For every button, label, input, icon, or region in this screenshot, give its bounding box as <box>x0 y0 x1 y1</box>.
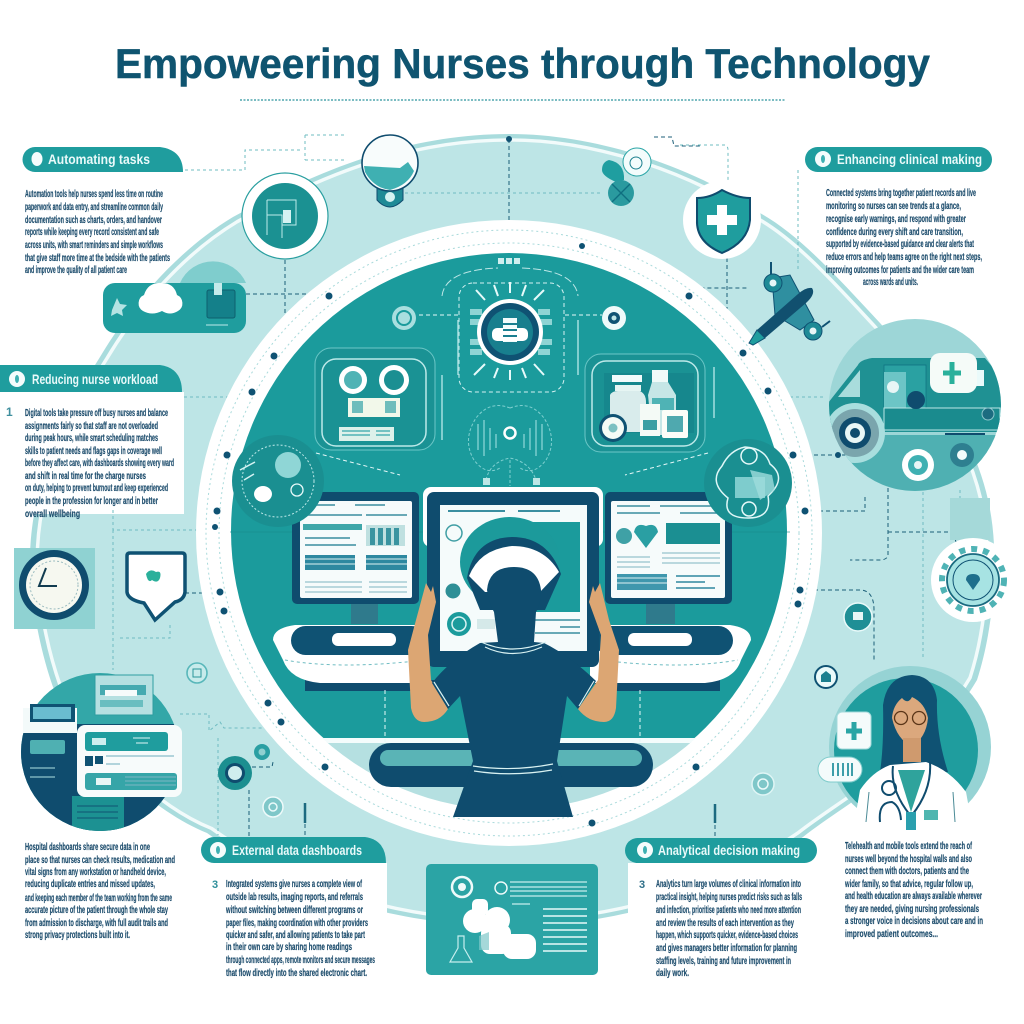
pill: reducing workload: Reducing nurse workload <box>32 371 158 387</box>
pill: analytical decisions: Analytical decision making <box>658 842 800 858</box>
connector curves <box>316 453 708 475</box>
ring dots <box>212 136 880 826</box>
text: reducing workload <box>25 408 174 520</box>
icon: face badge <box>752 773 774 795</box>
icon: small ring right <box>602 306 626 330</box>
text: external data: quicker and safer, and allowing patients to take part <box>226 930 365 941</box>
text: external data: in their own care by sharing home readings <box>226 942 352 953</box>
text: external data <box>225 879 375 979</box>
short connectors around the gear <box>419 314 602 316</box>
central white ring <box>196 220 822 846</box>
text: bottom left: accurate picture of the patient through the whole stay <box>25 905 168 916</box>
pill: external data: External data dashboards <box>232 842 362 858</box>
vertical guide lines <box>385 690 640 742</box>
text: bottom left: reducing duplicate entries and missed updates, <box>25 879 155 890</box>
text: reducing workload: skills to patient needs and flags gaps in coverage well <box>25 446 162 457</box>
text: analytical decisions: and infection, prioritise patients who need more attention <box>656 905 801 916</box>
pill: automating tasks: Automating tasks <box>48 151 150 167</box>
icon: brain signal <box>468 406 552 486</box>
text: enhancing <box>826 188 982 288</box>
pill: analytical decisions <box>625 838 817 863</box>
tick marks <box>305 803 715 823</box>
text: automating tasks: documentation such as charts, orders, and handover <box>25 215 162 226</box>
pill: reducing workload <box>0 365 182 392</box>
text: external data: without switching between different programs or <box>225 905 363 916</box>
text: automating tasks: paperwork and data entry, and streamline common daily <box>25 202 163 213</box>
panel: analytics <box>426 864 598 975</box>
text: reducing workload: Digital tools take pressure off busy nurses and balance <box>25 408 168 419</box>
icon: top cluster <box>602 148 651 206</box>
illustration: ambulance <box>825 319 1010 495</box>
text: bottom right: improved patient outcomes... <box>845 929 938 940</box>
illustration: doctor <box>818 666 991 830</box>
text: analytical decisions: Analytics turn large volumes of clinical information into <box>656 879 801 890</box>
text: reducing workload: during peak hours, while smart scheduling matches <box>25 433 158 444</box>
text: bottom left: place so that nurses can check results, medication and <box>25 855 175 866</box>
text: analytical decisions: and review the results of each intervention as they <box>656 918 794 929</box>
icon: small lock badge <box>815 666 837 688</box>
panel: cloud task icons <box>103 261 246 333</box>
text: analytical decisions: practical insight, helping nurses predict risks such as falls <box>656 892 802 903</box>
text: automating tasks: and improve the quality of all patient care <box>25 265 127 276</box>
text: enhancing: across wards and units. <box>863 277 918 288</box>
icon: left data bubble <box>232 435 324 527</box>
text: bottom left: from admission to discharge, with full audit trails and <box>25 918 168 929</box>
text: analytical decisions: happen, which supports quicker, evidence-based choices <box>656 930 798 941</box>
text: reducing workload: overall wellbeing <box>25 509 80 520</box>
title underline <box>240 99 785 101</box>
panel: medication card <box>585 354 705 452</box>
console bar <box>369 743 653 787</box>
text: reducing workload: assignments fairly so that staff are not overloaded <box>25 421 158 432</box>
text: external data: that flow directly into the shared electronic chart. <box>226 968 367 979</box>
icon: gear badge <box>442 258 578 392</box>
doctor badge card <box>837 712 871 749</box>
pill: external data <box>201 837 386 863</box>
number 1: 1 <box>6 405 13 419</box>
monitor: centre <box>423 487 603 667</box>
text: bottom left <box>25 842 175 941</box>
desk: left <box>273 625 435 691</box>
nurse cap <box>460 517 561 610</box>
text: automating tasks: across units, with smart reminders and simple workflows <box>25 240 163 251</box>
text: bottom left: vital signs from any workstation or handheld device, <box>25 867 166 878</box>
nurse body <box>432 567 596 817</box>
white backing panels <box>0 392 1024 1003</box>
number 3 left: 3 <box>212 879 218 891</box>
number 3 right: 3 <box>639 879 645 891</box>
icon: circular floor plan <box>242 173 328 259</box>
text: automating tasks <box>25 189 170 276</box>
text: reducing workload: before they affect care, with dashboards showing every ward <box>25 458 174 469</box>
text: analytical decisions: staffing levels, training and future improvement in <box>656 956 791 967</box>
icon: gauge <box>362 135 418 207</box>
text: through connected apps, remote monitors and secure messages <box>226 955 375 966</box>
title: Empoweering Nurses through Technology <box>115 40 931 87</box>
icon: gear sensor <box>931 498 1015 622</box>
text: bottom left: and keeping each member of the team working from the same <box>25 893 172 904</box>
text: automating tasks: Automation tools help nurses spend less time on routine <box>25 189 163 200</box>
side ticks <box>442 320 714 440</box>
icon: speech bubble <box>127 553 185 620</box>
desk: right <box>590 625 751 691</box>
doctor barcode pill <box>818 757 862 782</box>
text: automating tasks: reports while keeping every record consistent and safe <box>25 227 159 238</box>
text: analytical decisions: and gives managers better information for planning <box>656 943 797 954</box>
icon: small ring left <box>392 306 416 330</box>
text: analytical decisions <box>656 879 802 979</box>
connector lines <box>113 135 960 838</box>
small icons lower left <box>187 663 283 817</box>
text: external data: outside lab results, imaging reports, and referrals <box>226 892 363 903</box>
text: bottom left: strong privacy protections built into it. <box>25 930 130 941</box>
text: automating tasks: that give staff more time at the bedside with the patients <box>25 253 170 264</box>
icon: shield <box>683 181 761 259</box>
background band <box>30 134 994 926</box>
central teal circle <box>220 253 800 822</box>
text: external data: Integrated systems give nurses a complete view of <box>226 879 362 890</box>
monitor: left <box>292 492 419 624</box>
icon: clock <box>14 548 95 629</box>
panel: devices card <box>315 348 435 450</box>
icon: teal badge <box>844 603 872 631</box>
monitor: right <box>605 492 732 624</box>
icon: right lock bubble <box>704 439 792 527</box>
icon: drone <box>749 262 830 345</box>
illustration: dashboard circle <box>20 672 182 834</box>
text: reducing workload: on duty, helping to prevent burnout and keep experienced <box>25 483 168 494</box>
text: bottom right <box>844 841 983 940</box>
text: bottom left: Hospital dashboards share secure data in one <box>25 842 150 853</box>
text: external data: paper files, making coordination with other providers <box>226 918 368 929</box>
pill: enhancing: Enhancing clinical making <box>837 151 982 167</box>
text: reducing workload: and shift in real time for the charge nurses <box>25 471 146 482</box>
pill: automating tasks <box>22 147 183 172</box>
text: reducing workload: people in the profession for longer and in better <box>25 496 158 507</box>
illustration: nurse <box>408 517 619 817</box>
nurse arms <box>408 583 619 722</box>
text: analytical decisions: daily work. <box>656 968 689 979</box>
pill: enhancing <box>805 147 992 172</box>
